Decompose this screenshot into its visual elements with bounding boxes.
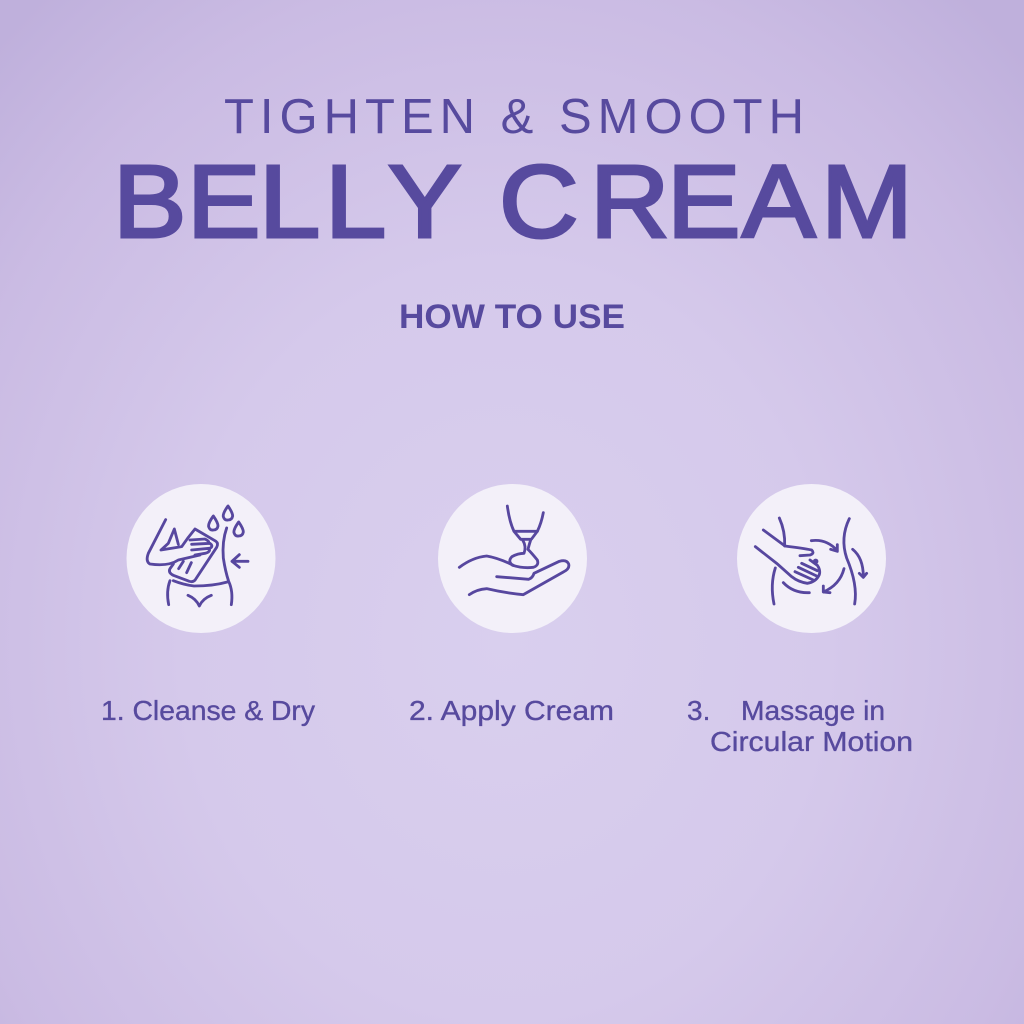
step 3: massage in circular motion bbox=[687, 484, 913, 757]
step 1: cleanse and dry bbox=[101, 484, 315, 726]
label: step 3: Circular Motion bbox=[710, 726, 913, 757]
label: step 3: Massage in bbox=[741, 695, 885, 726]
icon: circle badge with tube and hand bbox=[438, 484, 587, 633]
heading: how to use: HOW TO USE bbox=[399, 298, 625, 336]
label: step 2: 2. Apply Cream bbox=[409, 695, 614, 726]
step 2: apply cream bbox=[409, 484, 614, 726]
label: step 3: 3. bbox=[687, 695, 710, 726]
title: subtitle line: TIGHTEN & SMOOTH bbox=[224, 90, 804, 144]
icon: circle badge with hand on torso and arrows bbox=[737, 484, 886, 633]
label: step 1: 1. Cleanse & Dry bbox=[101, 695, 315, 726]
icon: circle badge with body, towel and water drops bbox=[126, 484, 276, 633]
title: product name: BELLY CREAM bbox=[113, 143, 913, 259]
